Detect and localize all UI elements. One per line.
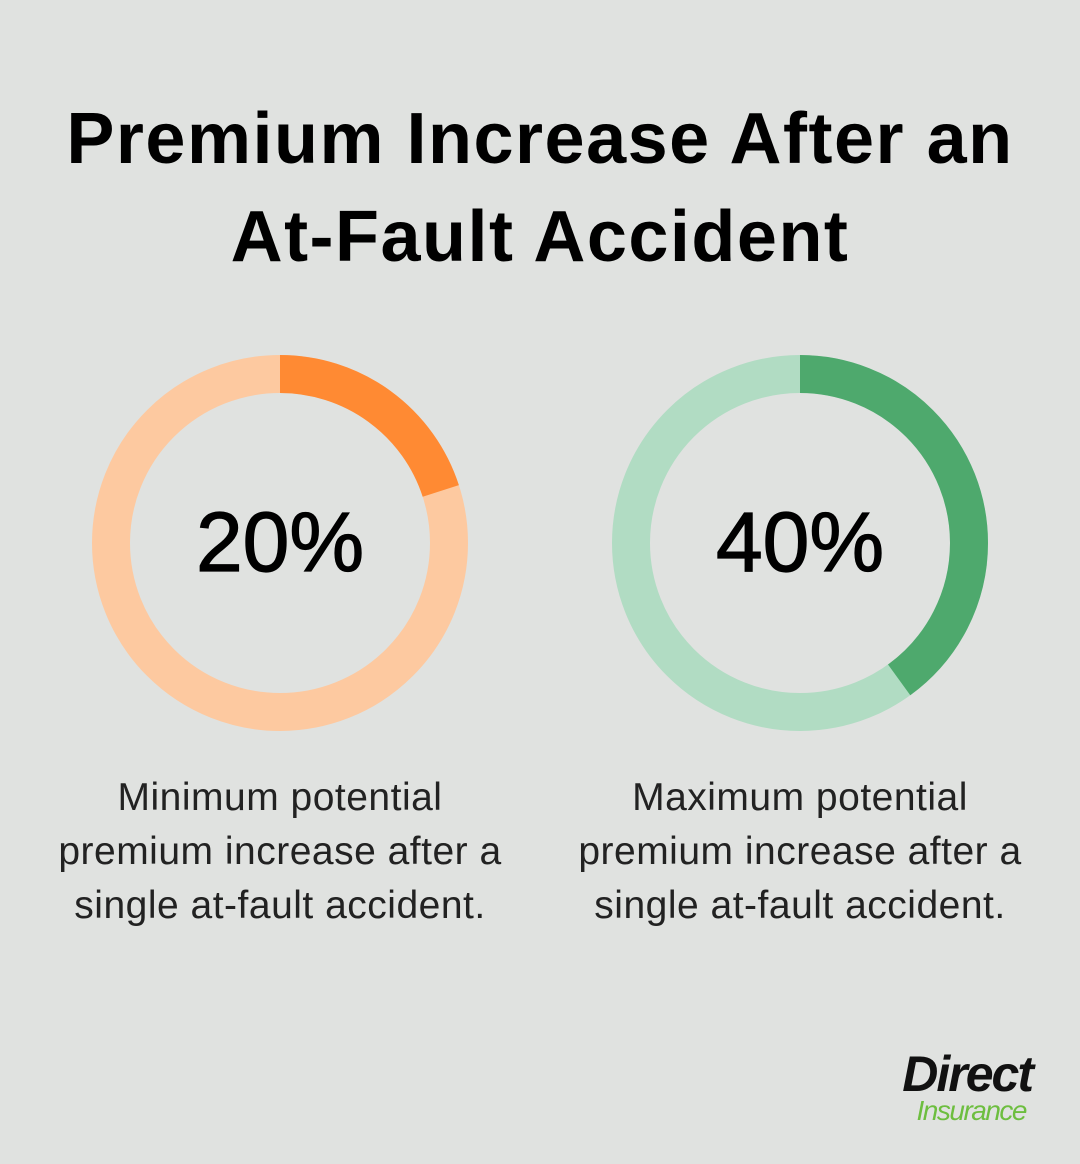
text: maximum: Maximum potential <box>632 776 968 819</box>
text: minimum: single at-fault accident. <box>74 884 486 927</box>
logo: Insurance <box>917 1095 1026 1126</box>
title: At-Fault Accident <box>231 197 849 277</box>
title: Premium Increase After an <box>66 99 1014 179</box>
title <box>66 99 1014 277</box>
text: minimum: premium increase after a <box>58 830 502 873</box>
donut: 40%: 40% <box>716 495 884 589</box>
text: maximum: single at-fault accident. <box>594 884 1006 927</box>
donut: 20%: 20% <box>196 495 364 589</box>
text: minimum <box>58 776 502 927</box>
text: maximum <box>578 776 1022 927</box>
logo <box>902 1046 1036 1126</box>
text: minimum: Minimum potential <box>118 776 442 819</box>
donut: 20% <box>92 355 468 731</box>
logo: Direct <box>902 1046 1032 1102</box>
text: maximum: premium increase after a <box>578 830 1022 873</box>
donut: 40% <box>612 355 988 731</box>
